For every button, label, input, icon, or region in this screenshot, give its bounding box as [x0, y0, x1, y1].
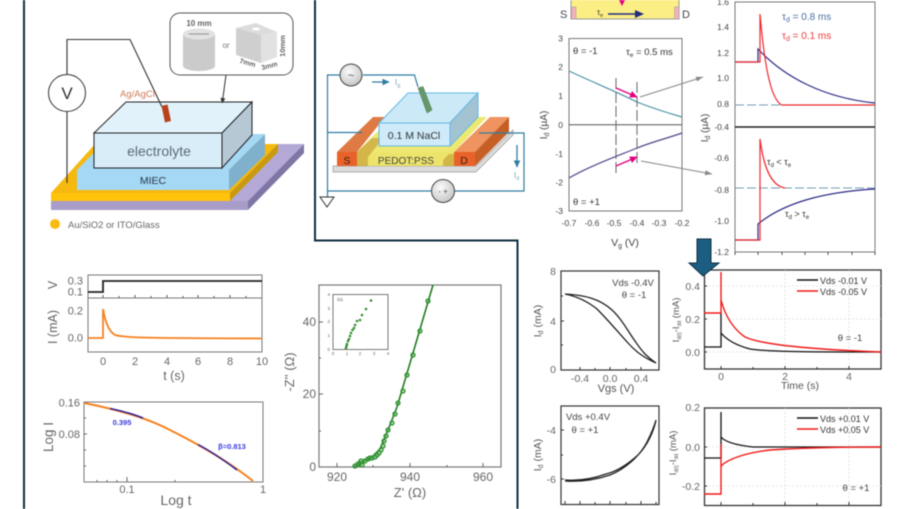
chart: transfer curve theta -1: 8 — [550, 266, 556, 278]
chart: measured transient theta -1: 0 — [718, 371, 724, 383]
chart: Id versus Vg simulation: V — [611, 237, 618, 249]
chart: Id versus Vg simulation: I — [539, 136, 550, 139]
arrow: link to lower transient — [641, 161, 712, 174]
y axis labels: -3 — [555, 206, 563, 216]
gate electrode — [418, 86, 432, 113]
chart: measured transient theta +1: I — [668, 473, 679, 475]
y axis labels: 1.0 — [717, 73, 729, 83]
chart: transfer curve theta +1: θ = +1 — [572, 425, 598, 436]
blue slow transients — [735, 49, 875, 240]
chart: Id versus Vg simulation: τ — [626, 47, 630, 58]
chart: simulated drain current transients: d — [789, 215, 792, 221]
gold electrode layer — [51, 144, 278, 201]
chart: log-log current decay: Log t — [160, 492, 192, 508]
current response plot: 0.2 — [68, 306, 83, 318]
chart: Nyquist impedance plot: 920 — [327, 470, 347, 484]
chart: measured transient theta +1: 0.2 — [685, 402, 700, 414]
panel dividers — [24, 0, 518, 509]
chart: transfer curve theta +1: -4 — [547, 425, 556, 437]
chart: Nyquist impedance plot: 40 — [303, 315, 316, 329]
chart: simulated drain current transients: I — [700, 140, 711, 142]
chart: transfer curve theta +1: -6 — [547, 474, 556, 486]
current response plot: 8 — [227, 356, 233, 368]
chart: Nyquist impedance plot: 940 — [400, 470, 420, 484]
chart: measured transient theta +1: -I — [668, 459, 679, 465]
chart: measured transient theta -1: I — [671, 340, 682, 342]
current response plot: 0 — [100, 356, 106, 368]
y axis labels: 2 — [558, 62, 563, 72]
voltmeter and wiring: V — [61, 84, 73, 103]
chart: transfer curve theta -1: 0 — [550, 364, 556, 376]
AC gate source: ~ — [348, 70, 354, 82]
chart: measured transient theta -1: Time (s) — [781, 380, 819, 392]
y axis labels: 1 — [558, 91, 563, 101]
y axis labels: -0.6 — [714, 153, 729, 163]
inset: full-range Nyquist: 1 — [327, 333, 330, 338]
chart: log-log current decay: 0.16 — [59, 398, 80, 410]
chart: simulated drain current transients: (µA) — [700, 114, 711, 136]
teal theta -1 curve — [569, 71, 682, 117]
inset: full-range Nyquist: 2 — [327, 319, 330, 324]
chart: Id versus Vg simulation: (µA) — [539, 111, 550, 133]
gate current arrow: g — [397, 83, 400, 89]
chart: log-log current decay: 0.1 — [119, 484, 135, 496]
current response plot: 4 — [164, 356, 170, 368]
red fast transients — [735, 14, 875, 240]
chart: Nyquist impedance plot: 0 — [309, 460, 316, 474]
circuit wiring — [320, 75, 524, 207]
drain contact: D — [460, 155, 468, 167]
y axis labels: -0.8 — [714, 185, 729, 195]
y axis labels: -2 — [555, 178, 563, 188]
chart: transfer curve theta -1: d — [538, 330, 545, 334]
inset: full-range Nyquist: 1 — [346, 351, 349, 356]
chart: simulated drain current transients: τ — [767, 157, 771, 167]
chart: measured transient theta -1: 0.2 — [685, 314, 700, 326]
chart: log-log current decay: 1 — [260, 484, 266, 496]
current response plot: 2 — [132, 356, 138, 368]
inset: full-range Nyquist: 3 — [373, 351, 376, 356]
chart: simulated drain current transients: = 0.1 ms — [790, 31, 831, 42]
y axis labels: 0.8 — [717, 99, 729, 109]
chart: measured transient theta -1: 0.4 — [685, 281, 700, 293]
glass substrate — [333, 130, 513, 172]
chart: log-log current decay — [41, 398, 266, 508]
legend: Vds -0.05 V — [820, 287, 867, 297]
current response plot: I (mA) — [46, 310, 60, 344]
chart: transfer curve theta -1: (mA) — [532, 305, 544, 330]
fit line — [353, 285, 433, 467]
chart: simulated drain current transients: e — [788, 163, 792, 169]
chart: simulated drain current transients — [700, 0, 875, 257]
chart: transfer curve theta +1: d — [538, 464, 545, 468]
MIEC layer: MIEC — [140, 175, 167, 187]
y axis labels: -0.4 — [714, 122, 729, 132]
chart: log-log current decay: β=0.813 — [218, 442, 246, 451]
chart: simulated drain current transients: e — [806, 215, 810, 221]
gate current arrow: I — [395, 78, 397, 87]
y axis labels — [714, 0, 729, 257]
panel: PEDOT:PSS transistor schematic — [320, 64, 524, 207]
chart: transfer curve theta -1: 0.4 — [634, 373, 648, 385]
chart: measured transient theta +1: (mA) — [668, 431, 679, 454]
inset: full-range Nyquist: 4 — [327, 292, 330, 297]
chart: measured transient theta -1: -I — [671, 326, 682, 332]
chart: measured transient theta +1: θ = +1 — [843, 483, 869, 494]
inset: electrolyte geometry: 10mm — [278, 35, 287, 57]
voltage step plot: V — [46, 280, 60, 289]
chart: transfer curve theta -1: -0.4 — [571, 373, 589, 385]
chart: transfer curve theta +1: I — [532, 468, 544, 471]
gate current arrow — [372, 78, 400, 89]
source contact — [337, 117, 385, 167]
Ag/AgCl electrode: Ag/AgCl — [120, 89, 155, 100]
legend: Vds +0.05 V — [820, 425, 869, 435]
inset: full-range Nyquist: 0 — [332, 351, 335, 356]
drain current arrow — [514, 145, 519, 182]
chart: measured transient theta -1: 0.0 — [685, 347, 700, 359]
electrolyte block: electrolyte — [127, 143, 191, 159]
source contact: S — [343, 155, 351, 167]
chart: simulated drain current transients: d — [771, 163, 774, 169]
chart: simulated drain current transients: τ — [785, 209, 789, 219]
y axis labels: -1.0 — [714, 216, 729, 226]
chart: Id versus Vg simulation: d — [544, 132, 551, 136]
NaCl electrolyte block — [379, 93, 478, 146]
chart: measured transient theta +1: -0.2 — [682, 481, 700, 493]
chart: Id versus Vg simulation: θ = +1 — [573, 197, 600, 208]
chart: measured transient theta -1: dd — [677, 321, 683, 326]
chart: simulated drain current transients: < τ — [774, 157, 788, 167]
panel: simulated channel schematic: τ — [597, 8, 600, 17]
purple theta +1 curve — [569, 133, 682, 178]
chart: transfer curve theta -1 — [532, 266, 659, 395]
chart: measured transient theta -1: (mA) — [671, 298, 682, 321]
y axis labels: 1.4 — [717, 22, 729, 32]
chart: transfer curve theta -1: Vgs (V) — [598, 383, 634, 395]
panel: simulated channel schematic: D — [682, 9, 690, 21]
legend — [797, 414, 869, 435]
inset: full-range Nyquist: kΩ — [337, 297, 343, 302]
legend — [797, 276, 867, 297]
pink step arrows — [616, 88, 637, 166]
chart: I-V step and transient — [46, 275, 268, 383]
chart: simulated drain current transients: d — [705, 136, 712, 140]
inset: electrolyte geometry — [170, 13, 293, 101]
chart: transfer curve theta -1: Vds -0.4V — [612, 278, 655, 289]
chart: transfer curve theta -1: I — [532, 334, 544, 337]
chart: measured transient theta -1: 4 — [846, 371, 852, 383]
x axis labels: -0.4 — [630, 218, 645, 228]
DC drain source — [432, 180, 454, 202]
chart: measured transient theta +1: d(t) — [674, 465, 680, 473]
legend: gold electrode material: Au/SiO2 or ITO/Glass — [68, 220, 160, 231]
data markers — [353, 299, 430, 468]
current response plot: t (s) — [163, 369, 185, 383]
chart: transfer curve theta +1 — [532, 406, 659, 509]
y axis labels: -1 — [555, 149, 563, 159]
inset: electrolyte geometry: 10 mm — [186, 19, 212, 28]
x axis labels: -0.3 — [652, 218, 667, 228]
inset: full-range Nyquist — [327, 292, 390, 356]
chart: Nyquist impedance plot: Z' (Ω) — [394, 485, 426, 500]
chart: Nyquist impedance plot — [282, 285, 501, 500]
y axis labels: 3 — [558, 34, 563, 44]
panel: simulated channel schematic — [560, 0, 690, 21]
drain current arrow: d — [516, 176, 519, 182]
inset: electrolyte geometry: 3mm — [261, 61, 278, 72]
current response plot: 6 — [195, 356, 201, 368]
PEDOT:PSS channel — [357, 117, 487, 167]
chart: Id versus Vg simulation: g — [618, 243, 622, 250]
chart: measured transient theta -1: θ = -1 — [838, 333, 862, 344]
chart: measured transient theta +1: 0.0 — [685, 442, 700, 454]
chart: Id versus Vg simulation: e — [630, 52, 634, 59]
y axis labels: -1.2 — [714, 247, 729, 257]
chart: log-log current decay: 0.08 — [59, 429, 80, 441]
x axis labels: -0.7 — [562, 218, 577, 228]
chart: simulated drain current transients: > τ — [792, 209, 806, 219]
chart: transfer curve theta +1: Vds +0.4V — [566, 412, 611, 423]
voltmeter and wiring — [48, 40, 162, 183]
drain contact — [454, 117, 509, 167]
panel: simulated channel schematic: e — [600, 13, 603, 19]
chart: measured transient theta +1 — [668, 402, 881, 506]
chart: measured transient theta -1: d(t) — [677, 332, 683, 340]
current response plot: 10 — [256, 356, 268, 368]
x axis labels: -0.6 — [585, 218, 600, 228]
inset: full-range Nyquist: 3 — [327, 306, 330, 311]
x axis labels — [562, 218, 690, 228]
x axis labels: -0.2 — [675, 218, 690, 228]
panel: MIEC two-terminal device schematic — [48, 13, 304, 231]
chart: Id versus Vg simulation: θ = -1 — [573, 46, 598, 57]
inset: full-range Nyquist: 2 — [359, 351, 362, 356]
chart: simulated drain current transients: = 0.8 ms — [790, 12, 831, 23]
MIEC layer — [77, 134, 265, 190]
chart: Nyquist impedance plot: 960 — [473, 470, 493, 484]
chart: measured transient theta +1: dd — [674, 454, 680, 459]
Ag/AgCl electrode — [120, 89, 171, 122]
inset: full-range Nyquist: 0 — [327, 347, 330, 352]
steady state dashes — [735, 105, 875, 188]
current response plot: 0.0 — [68, 332, 83, 344]
chart: transfer curve theta +1: (mA) — [532, 439, 544, 464]
current response plot — [46, 298, 268, 383]
chart: Nyquist impedance plot: 20 — [303, 387, 316, 401]
chart: simulated drain current transients: d — [786, 17, 790, 24]
x axis labels: -0.5 — [607, 218, 622, 228]
y axis labels: 1.2 — [717, 48, 729, 58]
chart: Nyquist impedance plot: -Z'' (Ω) — [282, 352, 297, 392]
chart: Id versus Vg simulation — [539, 34, 690, 250]
chart: measured transient theta -1: 2 — [782, 371, 788, 383]
chart: transfer curve theta -1: 4 — [550, 316, 556, 328]
DC drain source: - + — [438, 187, 448, 196]
NaCl electrolyte block: 0.1 M NaCl — [388, 130, 440, 142]
legend: Vds -0.01 V — [820, 276, 867, 286]
chart: log-log current decay: 0.395 — [113, 418, 131, 427]
fit segments — [110, 408, 237, 470]
voltage step plot: 0.1 — [68, 286, 83, 298]
chart: simulated drain current transients: τ — [782, 31, 786, 42]
voltage step plot — [46, 275, 262, 298]
y axis labels: 0 — [558, 120, 563, 130]
PEDOT:PSS channel: PEDOT:PSS — [378, 156, 434, 167]
arrow: link to upper transient — [640, 77, 703, 97]
drain current arrow: I — [514, 171, 516, 180]
purple substrate — [51, 144, 304, 210]
chart: transfer curve theta -1: 0.0 — [603, 373, 617, 385]
chart: measured transient theta -1 — [671, 270, 881, 392]
chart: log-log current decay: Log I — [41, 422, 56, 452]
panel: simulated channel schematic: S — [560, 9, 567, 21]
AC gate source — [340, 64, 362, 86]
legend: Vds +0.01 V — [820, 414, 869, 424]
chart: Id versus Vg simulation: (V) — [622, 237, 639, 249]
inset: full-range Nyquist: 4 — [387, 351, 390, 356]
arrow: down to measured data — [689, 239, 719, 276]
y axis labels — [555, 34, 563, 216]
inset: electrolyte geometry: or — [222, 41, 230, 50]
inset: electrolyte geometry: 7mm — [239, 58, 256, 69]
electrolyte block — [94, 102, 252, 168]
chart: transfer curve theta -1: θ = -1 — [622, 290, 646, 301]
chart: simulated drain current transients: τ — [782, 12, 786, 23]
voltage step guides — [616, 78, 637, 173]
voltage step plot: 0.3 — [68, 276, 83, 288]
chart: simulated drain current transients: d — [786, 36, 790, 43]
chart: Id versus Vg simulation: = 0.5 ms — [633, 47, 673, 58]
